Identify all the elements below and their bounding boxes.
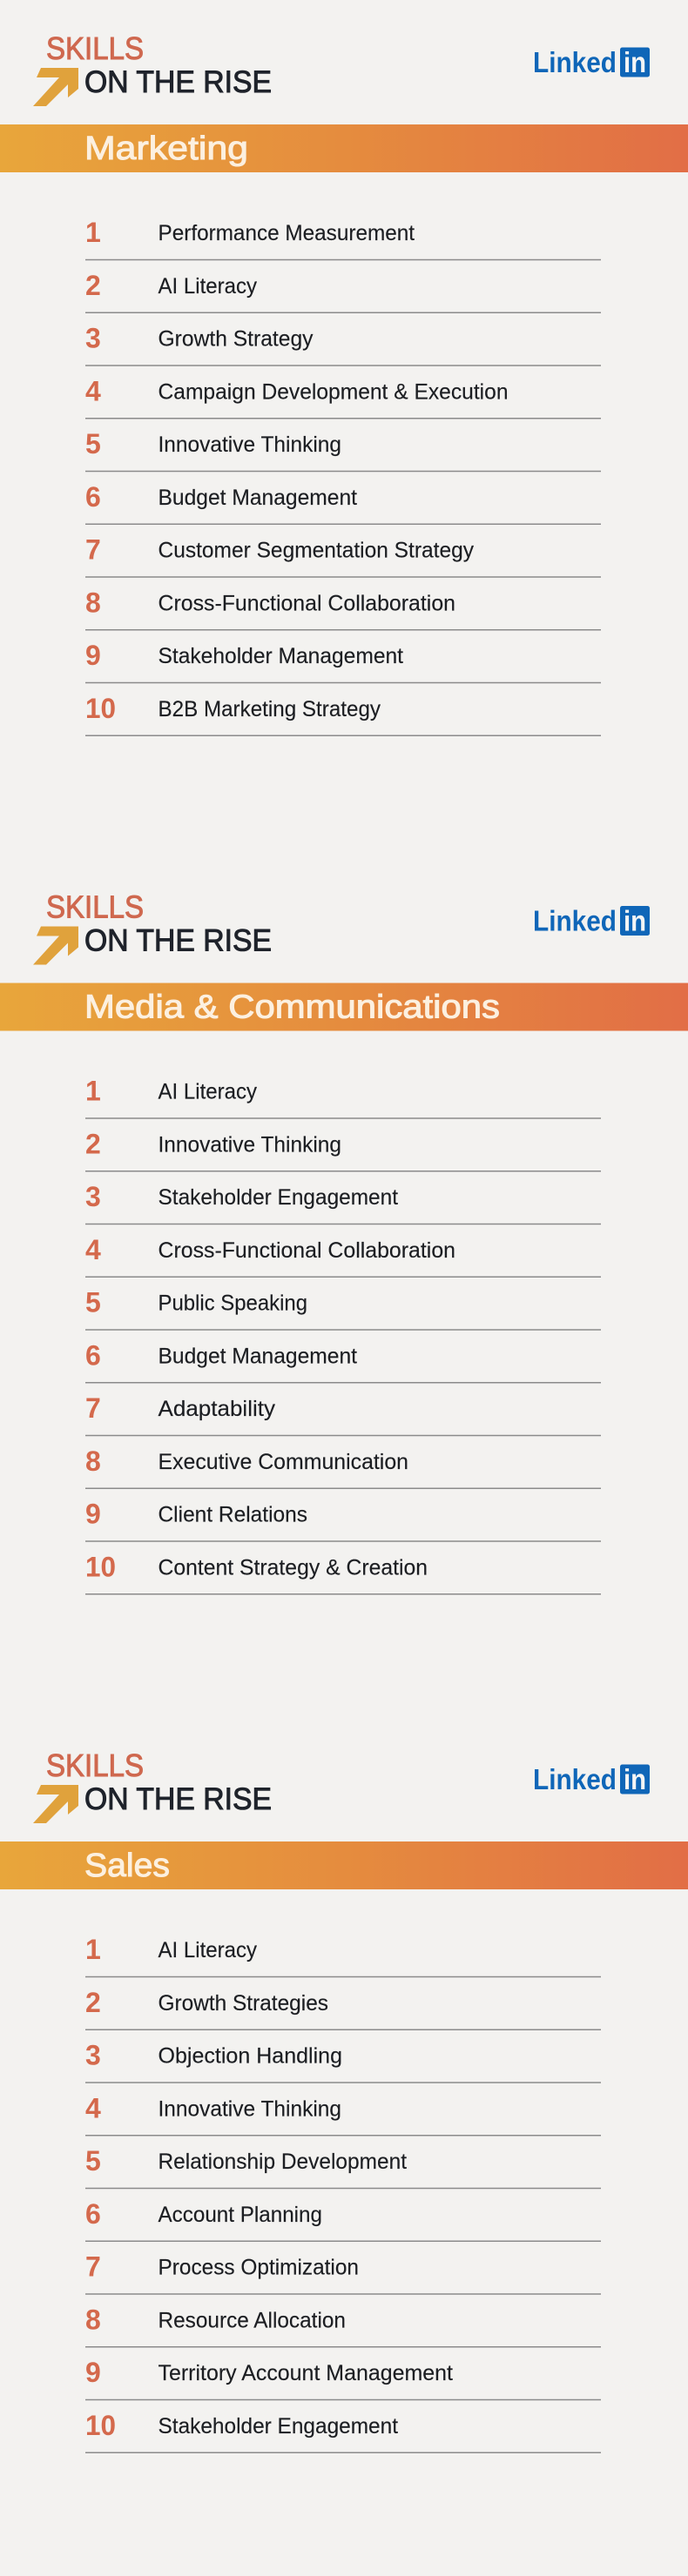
row 4: Cross-Functional Collaboration [159, 1238, 455, 1263]
row 6 [85, 2198, 601, 2241]
banner: Sales: Sales [84, 1848, 170, 1884]
panel: Sales [0, 1748, 688, 2452]
row 5: Relationship Development [159, 2150, 407, 2174]
row 10 [85, 693, 601, 735]
row 4: Innovative Thinking [159, 2096, 341, 2121]
row 4 [85, 2092, 601, 2136]
row 2 [85, 270, 601, 312]
row 7 [85, 1392, 601, 1436]
row 6: Budget Management [159, 486, 357, 510]
row 5: 5 [85, 2145, 101, 2177]
row 8: 8 [85, 2304, 101, 2335]
row 10: 10 [85, 2410, 116, 2441]
panel: Marketing [0, 30, 688, 735]
row 5: Public Speaking [159, 1291, 307, 1316]
row 9 [85, 1499, 601, 1541]
row 4: 4 [85, 2092, 101, 2123]
row 7: Customer Segmentation Strategy [159, 538, 474, 562]
row 9: 9 [85, 2357, 101, 2388]
row 8: Executive Communication [159, 1450, 408, 1474]
row 9 [85, 2357, 601, 2400]
row 7: Adaptability [159, 1397, 276, 1421]
row 5: 5 [85, 1286, 101, 1318]
row 10 [85, 1551, 601, 1594]
row 3: Stakeholder Engagement [159, 1185, 398, 1210]
row 3 [85, 322, 601, 366]
row 1 [85, 217, 601, 259]
logo: LinkedIn: Linked [533, 46, 617, 78]
row 10: B2B Marketing Strategy [159, 697, 381, 721]
banner: Sales [0, 1841, 688, 1889]
row 3 [85, 2040, 601, 2083]
row 10: 10 [85, 693, 116, 724]
row 3 [85, 1181, 601, 1224]
row 3: 3 [85, 2040, 101, 2071]
row 2: AI Literacy [159, 274, 257, 299]
logo: Skills on the Rise: SKILLS [46, 889, 144, 924]
logo: Skills on the Rise: ON THE RISE [84, 1782, 272, 1816]
banner: Media & Communications [0, 983, 688, 1030]
row 9: 9 [85, 1499, 101, 1530]
row 4: 4 [85, 375, 101, 406]
row 8 [85, 2304, 601, 2347]
logo: Skills on the Rise [33, 1748, 272, 1823]
row 6: 6 [85, 481, 101, 513]
ranked skills list: Sales [85, 1934, 601, 2452]
row 8: 8 [85, 587, 101, 618]
row 4 [85, 1234, 601, 1277]
row 2 [85, 1128, 601, 1171]
row 2: 2 [85, 1987, 101, 2018]
row 2: 2 [85, 1128, 101, 1159]
row 4: Campaign Development & Execution [159, 379, 509, 404]
row 7: 7 [85, 1392, 101, 1424]
row 7: Process Optimization [159, 2256, 359, 2280]
row 3: 3 [85, 322, 101, 353]
row 1 [85, 1934, 601, 1977]
row 8 [85, 587, 601, 630]
row 8 [85, 1446, 601, 1488]
row 9: Stakeholder Management [159, 644, 403, 668]
row 5: Innovative Thinking [159, 433, 341, 457]
row 5 [85, 2145, 601, 2188]
row 10 [85, 2410, 601, 2452]
row 1: 1 [85, 1076, 101, 1107]
banner: Marketing: Marketing [84, 131, 248, 167]
row 1: 1 [85, 217, 101, 248]
logo: Skills on the Rise: SKILLS [46, 1748, 144, 1783]
row 6: Account Planning [159, 2203, 322, 2227]
row 9 [85, 640, 601, 682]
row 6 [85, 1339, 601, 1383]
row 7: 7 [85, 534, 101, 566]
row 4: 4 [85, 1234, 101, 1265]
ranked skills list: Media & Communications [85, 1076, 601, 1594]
banner: Media & Communications: Media & Communications [84, 989, 500, 1025]
row 8: 8 [85, 1446, 101, 1477]
row 6: Budget Management [159, 1344, 357, 1368]
row 7: 7 [85, 2251, 101, 2282]
row 5: 5 [85, 428, 101, 460]
row 8: Resource Allocation [159, 2308, 346, 2332]
row 1: 1 [85, 1934, 101, 1965]
row 2: Growth Strategies [159, 1991, 328, 2016]
banner: Marketing [0, 124, 688, 172]
logo: LinkedIn: in [624, 905, 646, 936]
row 7 [85, 2251, 601, 2294]
row 8: Cross-Functional Collaboration [159, 591, 455, 615]
row 6 [85, 481, 601, 524]
row 1: AI Literacy [159, 1938, 257, 1962]
logo: Skills on the Rise: ON THE RISE [84, 924, 272, 957]
logo: LinkedIn: in [624, 1763, 646, 1795]
row 5 [85, 428, 601, 472]
row 6: 6 [85, 1339, 101, 1371]
row 6: 6 [85, 2198, 101, 2230]
logo: LinkedIn: Linked [533, 1763, 617, 1795]
row 10: Stakeholder Engagement [159, 2414, 398, 2438]
row 10: Content Strategy & Creation [159, 1555, 428, 1580]
row 3: Objection Handling [159, 2043, 342, 2068]
row 1: Performance Measurement [159, 221, 415, 245]
row 9: 9 [85, 640, 101, 671]
row 3: 3 [85, 1181, 101, 1212]
row 2: 2 [85, 270, 101, 301]
row 10: 10 [85, 1551, 116, 1582]
logo: LinkedIn: Linked [533, 905, 617, 936]
row 3: Growth Strategy [159, 327, 314, 352]
row 2 [85, 1987, 601, 2029]
logo: LinkedIn: in [624, 46, 646, 78]
logo: Skills on the Rise [33, 889, 272, 964]
row 1: AI Literacy [159, 1079, 257, 1104]
row 9: Client Relations [159, 1502, 307, 1526]
row 4 [85, 375, 601, 419]
logo: Skills on the Rise: ON THE RISE [84, 65, 272, 99]
ranked skills list: Marketing [85, 217, 601, 735]
panel: Media & Communications [0, 889, 688, 1594]
logo: Skills on the Rise: SKILLS [46, 30, 144, 66]
row 9: Territory Account Management [159, 2361, 453, 2385]
row 7 [85, 534, 601, 577]
row 2: Innovative Thinking [159, 1132, 341, 1157]
row 5 [85, 1286, 601, 1330]
row 1 [85, 1076, 601, 1118]
logo: Skills on the Rise [33, 30, 272, 106]
